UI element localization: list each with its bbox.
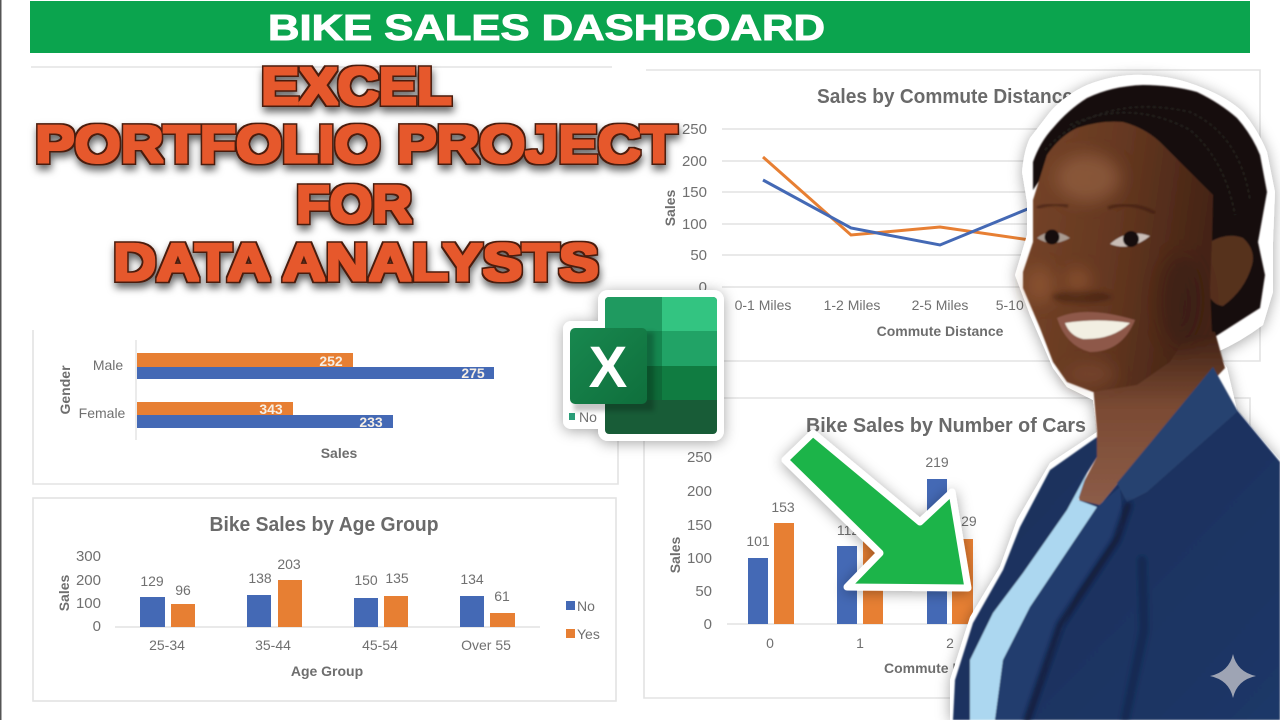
- headline overlay text: FOR: [296, 176, 412, 234]
- x axis labels: line chart: 0-1 Miles: [735, 297, 791, 313]
- y axis labels: number of cars: 0: [704, 616, 712, 633]
- chart title: commute distance: Sales by Commute Distance: [817, 86, 1073, 108]
- bar values: number of cars: 112: [837, 522, 859, 538]
- category labels: number of cars: 1: [856, 635, 864, 651]
- bar values: age group: 129: [140, 573, 164, 589]
- y axis labels: line chart: 100: [682, 216, 707, 233]
- bar values: gender: [259, 353, 485, 430]
- x axis title: number of cars: Commute Distance: [884, 660, 1011, 676]
- line series: blue: [763, 180, 1030, 245]
- headline overlay text: [35, 58, 677, 292]
- y axis labels: line chart: 50: [690, 247, 707, 264]
- jacket collar: [1117, 367, 1237, 502]
- bar values: age group: 96: [175, 582, 191, 598]
- x axis labels: line chart: 2-5 Miles: [912, 297, 968, 313]
- y axis labels: age group: 300: [76, 548, 101, 565]
- category labels: age group: [149, 637, 511, 653]
- bar values: age group: 150: [354, 572, 378, 588]
- y axis title: line chart: Sales: [662, 189, 678, 226]
- category labels: gender: Male: [93, 357, 123, 373]
- category labels: age group: 25-34: [149, 637, 185, 653]
- bar values: number of cars: 219: [925, 454, 949, 470]
- category labels: age group: 35-44: [255, 637, 291, 653]
- bar: female no: [137, 415, 393, 428]
- y axis labels: line chart: 0: [699, 279, 707, 296]
- panel: gender bar chart: [33, 330, 618, 484]
- y axis labels: line chart: 150: [682, 184, 707, 201]
- category labels: number of cars: [766, 635, 954, 651]
- category labels: gender: [79, 357, 126, 421]
- jacket folds: [1027, 505, 1144, 720]
- jacket: [953, 367, 1280, 720]
- y axis labels: number of cars: 150: [687, 517, 712, 534]
- bar values: number of cars: 101: [746, 533, 770, 549]
- headline overlay text: EXCEL: [261, 58, 452, 116]
- bar values: age group: 203: [277, 556, 301, 572]
- title banner: [30, 1, 1250, 53]
- person outline: [950, 75, 1280, 720]
- axis title: gender: Gender: [57, 365, 73, 415]
- hair braids: [1045, 107, 1250, 215]
- bar values: age group: 61: [494, 588, 510, 604]
- bar values: number of cars: [746, 454, 977, 549]
- bar values: age group: 135: [385, 570, 409, 586]
- category labels: gender: Female: [79, 405, 126, 421]
- arrow pointing to chart: [785, 433, 968, 588]
- jacket lapel: [995, 487, 1123, 720]
- bar values: gender: 252: [319, 353, 343, 369]
- y axis labels: line chart: 200: [682, 153, 707, 170]
- y axis labels: number of cars: 250: [687, 449, 712, 466]
- y axis labels: age group: 100: [76, 595, 101, 612]
- y axis labels: number of cars: [687, 449, 712, 633]
- y axis labels: number of cars: 50: [695, 583, 712, 600]
- legend: age group: Yes: [577, 626, 600, 642]
- panel: sales by commute distance line chart: [646, 70, 1260, 361]
- shirt: [970, 473, 1097, 720]
- facial features: [1026, 154, 1202, 384]
- category labels: age group: 45-54: [362, 637, 398, 653]
- bar values: gender: 233: [359, 414, 383, 430]
- hair: [1033, 85, 1267, 338]
- x axis title: age group: Age Group: [291, 663, 363, 679]
- y axis labels: age group: [76, 548, 101, 635]
- legend: age group: No: [577, 598, 595, 614]
- bar: female yes: [137, 402, 293, 415]
- headline overlay text: PORTFOLIO PROJECT: [35, 116, 677, 174]
- title banner: BIKE SALES DASHBOARD: [268, 7, 825, 48]
- bar: male yes: [137, 353, 353, 367]
- bar values: age group: 134: [460, 571, 484, 587]
- bar values: age group: [140, 556, 510, 604]
- legend: age group: [566, 598, 600, 642]
- ear: [1206, 236, 1253, 306]
- bar values: age group: 138: [248, 570, 272, 586]
- left edge line: [0, 0, 2, 720]
- bar values: number of cars: 129: [953, 513, 977, 529]
- icon: excel logo: [563, 290, 724, 441]
- category labels: number of cars: 0: [766, 635, 774, 651]
- icon: excel logo: No: [579, 409, 597, 425]
- y axis labels: age group: 200: [76, 572, 101, 589]
- x axis title: line chart: Commute Distance: [877, 323, 1004, 339]
- panel: top left empty chart frame: [31, 66, 612, 68]
- bars: number of cars: [748, 479, 973, 624]
- y axis title: age group: Sales: [56, 574, 72, 611]
- headline overlay text: DATA ANALYSTS: [113, 234, 599, 292]
- icon: excel logo: X: [589, 335, 628, 400]
- y axis title: number of cars: Sales: [667, 536, 683, 573]
- bar: male no: [137, 367, 494, 379]
- chart title: number of cars: Bike Sales by Number of Cars: [806, 415, 1086, 437]
- bars: age group: [140, 580, 515, 627]
- y axis labels: line chart: 250: [682, 121, 707, 138]
- bar values: number of cars: 153: [771, 499, 795, 515]
- icon: sparkle watermark: [1210, 654, 1256, 698]
- person cutout: [950, 75, 1280, 720]
- x axis labels: line chart: 5-10 Miles: [996, 297, 1060, 313]
- y axis labels: number of cars: 100: [687, 550, 712, 567]
- category labels: number of cars: 2: [946, 635, 954, 651]
- x axis labels: line chart: 1-2 Miles: [824, 297, 880, 313]
- y axis labels: line chart: [682, 121, 707, 296]
- x axis labels: line chart: [735, 297, 1060, 313]
- neck: [1078, 328, 1225, 505]
- category labels: age group: Over 55: [461, 637, 511, 653]
- face: [1023, 122, 1213, 392]
- y axis labels: number of cars: 200: [687, 483, 712, 500]
- y axis labels: age group: 0: [93, 618, 101, 635]
- axis title: sales: Sales: [321, 445, 358, 461]
- line series: orange: [763, 157, 1030, 240]
- chart title: age group: Bike Sales by Age Group: [210, 514, 438, 536]
- panel: bike sales by age group: [33, 498, 616, 701]
- bar values: gender: 343: [259, 401, 283, 417]
- panel: bike sales by number of cars: [644, 398, 1250, 698]
- bar values: gender: 275: [461, 365, 485, 381]
